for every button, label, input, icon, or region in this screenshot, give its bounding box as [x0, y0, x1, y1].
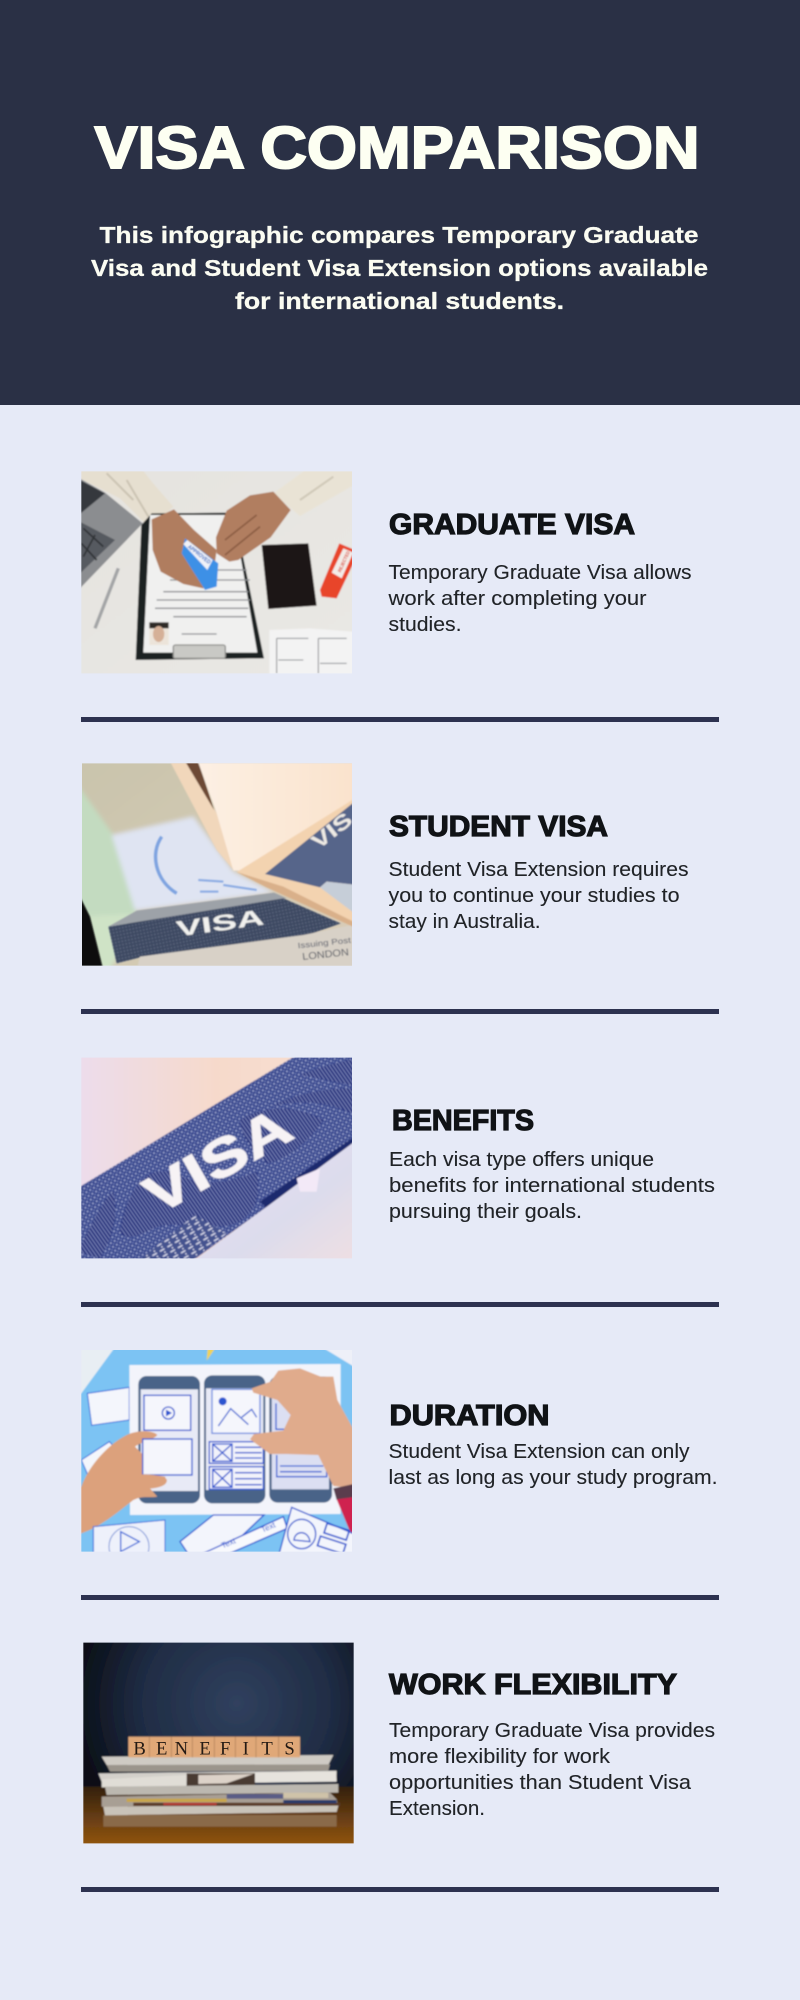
photo: hands stamping visa application — [77, 467, 357, 680]
body text — [387, 562, 692, 636]
panel: duration — [77, 1345, 717, 1567]
subtitle: Visa and Student Visa Extension options available — [91, 255, 708, 281]
body text: Temporary Graduate Visa provides — [389, 1720, 715, 1742]
body text: Each visa type offers unique — [389, 1149, 654, 1171]
photo: passport visa pages: VISA — [175, 905, 266, 942]
body text: studies. — [388, 614, 462, 636]
body text — [389, 1149, 715, 1223]
body text: stay in Australia. — [388, 911, 540, 933]
photo: hands stamping visa application: REJECTED — [337, 550, 351, 573]
body text: benefits for international students — [389, 1175, 715, 1197]
photo: passport visa pages: LONDON — [302, 947, 349, 963]
subtitle: for international students. — [235, 288, 564, 314]
body text: Temporary Graduate Visa allows — [388, 562, 692, 584]
block letters: F — [220, 1738, 230, 1759]
heading: STUDENT VISA — [389, 811, 608, 843]
header panel — [0, 0, 800, 405]
subtitle — [91, 222, 708, 314]
heading: GRADUATE VISA — [389, 509, 635, 541]
block letters: E — [199, 1738, 211, 1759]
heading: DURATION — [390, 1400, 550, 1432]
block letters: N — [175, 1738, 189, 1759]
body text: last as long as your study program. — [388, 1467, 718, 1489]
photo: passport visa pages: VIS — [307, 808, 357, 854]
photo: benefits blocks on newspapers — [78, 1638, 358, 1848]
heading: BENEFITS — [392, 1105, 534, 1137]
panel: work flexibility — [78, 1638, 715, 1848]
photo: hands arranging app wireframes — [81, 1350, 352, 1552]
body text: Student Visa Extension requires — [388, 859, 688, 881]
body text: more flexibility for work — [389, 1746, 611, 1768]
title: VISA COMPARISON — [94, 115, 699, 181]
photo: passport visa pages — [77, 758, 357, 972]
body text: opportunities than Student Visa — [389, 1772, 692, 1794]
body text — [389, 1720, 715, 1820]
photo: visa security band: VISA — [134, 1096, 302, 1226]
photo: hands arranging app wireframes: Text — [220, 1536, 238, 1550]
block letters: S — [284, 1738, 295, 1759]
photo: passport visa pages: Issuing Post — [297, 936, 352, 950]
body text: Extension. — [389, 1798, 485, 1820]
body text — [388, 859, 688, 933]
photo: hands stamping visa application: APPROVED — [186, 544, 211, 566]
photo: visa security band — [77, 1052, 357, 1265]
panel: benefits — [77, 1052, 715, 1265]
heading: WORK FLEXIBILITY — [389, 1669, 677, 1701]
body text: Student Visa Extension can only — [388, 1441, 690, 1463]
body text: you to continue your studies to — [388, 885, 680, 907]
block letters: B — [133, 1738, 146, 1759]
body text: work after completing your — [387, 588, 647, 610]
photo: hands arranging app wireframes: Text — [260, 1520, 278, 1534]
panel: student visa — [77, 758, 688, 972]
block letters: T — [261, 1738, 273, 1759]
block letters: I — [243, 1738, 249, 1759]
block letters: E — [156, 1738, 167, 1759]
body text: pursuing their goals. — [389, 1201, 582, 1223]
body text — [388, 1441, 718, 1489]
subtitle: This infographic compares Temporary Graduate — [100, 222, 698, 248]
panel: graduate visa — [77, 467, 691, 680]
